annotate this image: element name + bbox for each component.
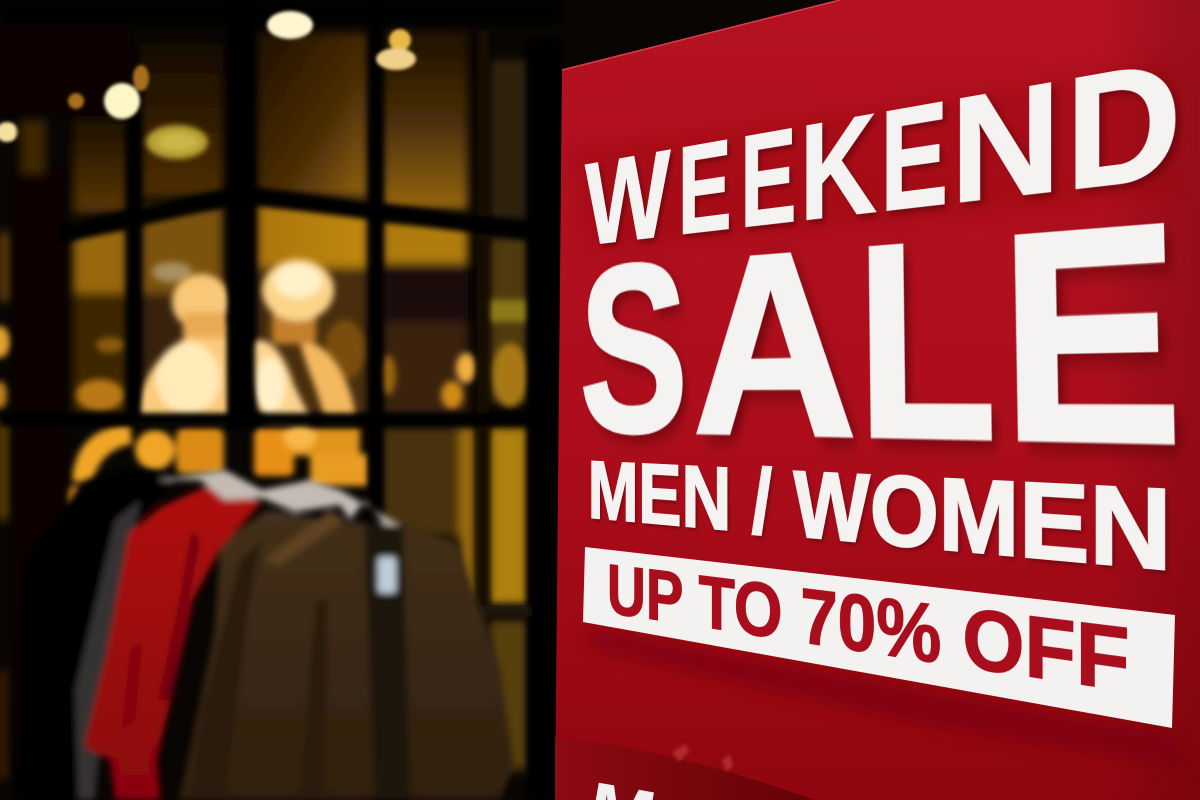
heading: WEEKEND: W — [585, 124, 671, 271]
mannequins — [135, 259, 356, 422]
heading: SALE: L — [855, 177, 999, 503]
white banner — [583, 547, 1175, 728]
window frame — [0, 0, 561, 800]
clothing rack — [15, 470, 514, 800]
heading: WEEKEND: K — [799, 84, 876, 250]
heading: SALE — [580, 157, 1186, 513]
ceiling lights — [0, 11, 416, 175]
heading: WEEKEND — [584, 24, 1184, 271]
heading: SALE: E — [999, 157, 1186, 513]
lower panel of sign — [555, 737, 815, 800]
heading: WEEKEND: E — [678, 112, 732, 262]
window panes — [0, 30, 528, 780]
heading: SALE: A — [692, 192, 857, 496]
heading: WEEKEND: N — [951, 48, 1061, 236]
heading: WEEKEND: E — [740, 99, 797, 256]
heading: WEEKEND: D — [1066, 24, 1182, 224]
banner text: UP TO 70% OFF: UP TO 70% OFF — [607, 550, 1130, 712]
warm interior light blobs — [0, 262, 528, 509]
heading: WEEKEND: E — [880, 70, 948, 242]
sign board — [555, 0, 1200, 800]
heading: SALE: S — [580, 210, 688, 487]
subheading: MEN / WOMEN: MEN / WOMEN — [588, 444, 1172, 596]
